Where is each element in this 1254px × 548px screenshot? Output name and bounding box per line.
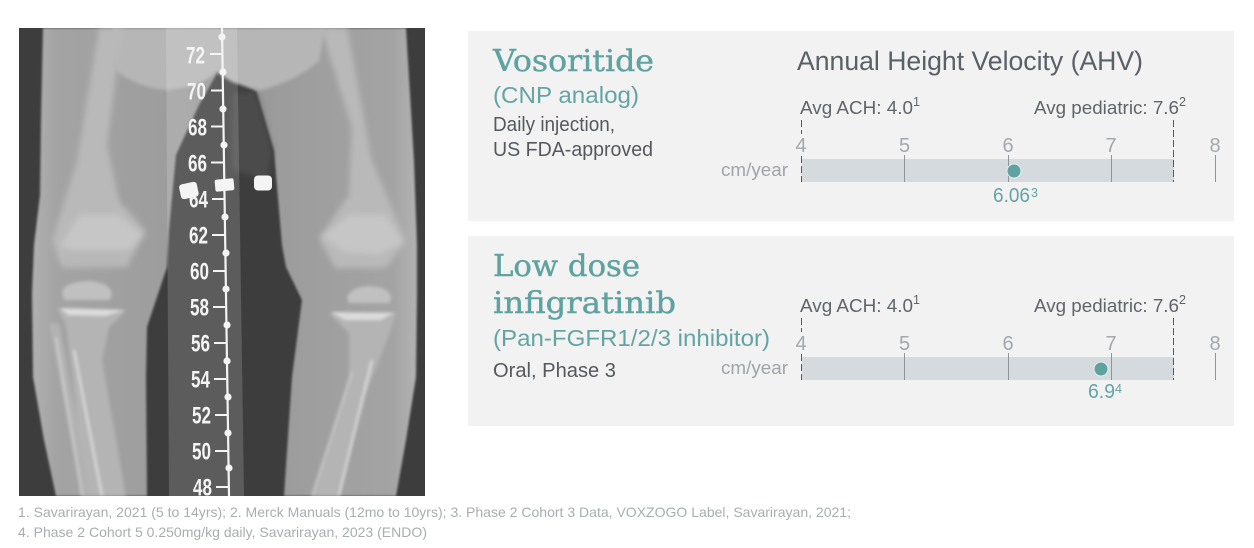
tissue between thighs [232,92,272,180]
ruler scale [186,28,233,502]
ruler scale: 70 [187,78,206,106]
heading: low dose infigratinib [493,249,676,321]
chart: AHV scale, infigratinib: Avg ACH: 4.0 [800,295,913,316]
description: oral phase 3: Oral, Phase 3 [493,360,616,382]
radiopaque markers [179,176,272,200]
ruler scale: 58 [190,294,209,322]
chart: AHV scale, vosoritide: 6 [1002,135,1014,157]
chart: AHV scale, infigratinib: 6.9 [1088,381,1115,403]
ruler scale: 72 [186,42,205,70]
ruler scale: 50 [192,438,211,466]
panel: low dose infigratinib [468,236,1234,426]
ruler scale: 60 [190,258,209,286]
chart: AHV scale, infigratinib: 1 [913,293,920,307]
chart: AHV scale, vosoritide: 4 [795,135,807,157]
chart: AHV scale, vosoritide: Avg ACH: 4.0 [800,97,913,118]
chart: AHV scale, infigratinib: 6 [1002,333,1014,355]
chart heading: Annual Height Velocity (AHV) [797,46,1143,76]
description: daily injection [493,114,653,161]
heading: low dose infigratinib: Low dose [493,249,640,284]
ruler scale: 56 [191,330,210,358]
ruler scale: 52 [192,402,211,430]
chart: AHV scale, vosoritide: 6.06 [993,185,1030,207]
footnotes: 4. Phase 2 Cohort 5 0.250mg/kg daily, Savarirayan, 2023 (ENDO) [18,524,427,540]
left femur [52,28,146,268]
chart: AHV scale, vosoritide: 1 [913,95,920,109]
chart: AHV scale, infigratinib: 8 [1209,333,1221,355]
heading: low dose infigratinib: infigratinib [493,286,676,321]
footnotes: 1. Savarirayan, 2021 (5 to 14yrs); 2. Merck Manuals (12mo to 10yrs); 3. Phase 2 Cohort 3 Data, VOXZOGO Label, Savarirayan, 2021; [18,504,851,520]
chart: AHV scale, infigratinib: Avg pediatric: 7.6 [1034,295,1179,316]
chart: AHV scale, vosoritide: cm/year [721,160,788,180]
chart: AHV scale, infigratinib: 4 [795,333,807,355]
chart: AHV scale, infigratinib: 7 [1105,333,1117,355]
chart: AHV scale, vosoritide: 2 [1179,95,1186,109]
heading: vosoritide: Vosoritide [492,44,654,79]
footnotes [18,504,851,540]
subheading: Pan-FGFR inhibitor: (Pan-FGFR1/2/3 inhibitor) [493,325,770,351]
chart: AHV scale, vosoritide: Avg pediatric: 7.6 [1034,97,1179,118]
chart: AHV scale, infigratinib: 4 [1115,382,1122,396]
subheading: CNP analog: (CNP analog) [493,82,639,108]
chart: AHV scale, infigratinib: 2 [1179,293,1186,307]
chart: AHV scale, vosoritide: 5 [899,135,910,157]
left leg [32,28,222,496]
x-ray image of legs with height ruler [19,28,425,502]
left knee, tibia and fibula [49,281,126,496]
ruler scale: 48 [193,474,212,502]
ruler scale: 54 [191,366,210,394]
description: daily injection: US FDA-approved [493,139,653,161]
panel: vosoritide [468,31,1234,221]
ruler strip [166,28,244,496]
right femur [319,28,406,268]
chart: AHV scale, infigratinib [721,293,1221,403]
chart: AHV scale, vosoritide: 8 [1209,135,1221,157]
ruler scale: 62 [189,222,208,250]
ruler scale: 66 [188,150,207,178]
chart: AHV scale, vosoritide [721,95,1221,207]
chart: AHV scale, infigratinib: cm/year [721,358,788,378]
description: daily injection: Daily injection, [493,114,615,136]
ruler scale: 64 [189,186,208,214]
chart: AHV scale, vosoritide: 3 [1031,186,1038,200]
chart: AHV scale, vosoritide: 7 [1105,135,1117,157]
ruler scale: 68 [188,114,207,142]
chart: AHV scale, infigratinib: 5 [899,333,910,355]
right leg [222,28,417,496]
pelvis soft tissue [112,28,325,91]
right knee, tibia and fibula [312,286,396,496]
